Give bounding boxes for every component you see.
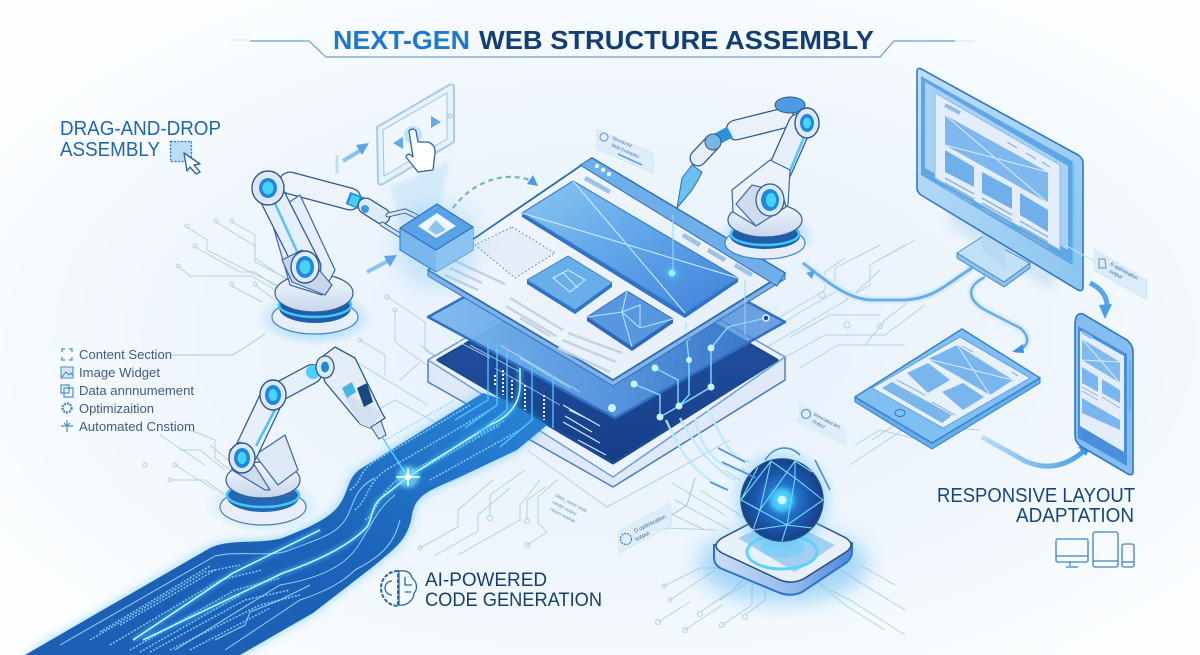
label: drag and drop — [60, 118, 221, 162]
component list: Data annnumement — [79, 384, 195, 398]
code snippet: return module — [550, 506, 577, 524]
status chip below stack: D optimization — [633, 514, 667, 535]
hero widget — [522, 213, 738, 318]
laser spark — [396, 466, 420, 488]
icon: mouse pointer — [184, 153, 200, 174]
browser header bar — [580, 158, 785, 286]
label: responsive layout adaptation — [937, 485, 1135, 567]
phone wireframe — [1082, 332, 1120, 430]
code snippet — [550, 492, 588, 524]
code stream band — [25, 350, 547, 655]
widget one — [527, 280, 612, 314]
status chip right of stack: Generated API — [813, 411, 841, 430]
swipe and pick arrows — [337, 143, 397, 272]
status chip right of stack: Output — [812, 418, 826, 430]
icon: gear brain — [381, 571, 416, 606]
status chip right of stack — [798, 403, 847, 447]
icon: content section — [62, 349, 72, 360]
chip near monitor — [1094, 249, 1147, 300]
status chip below stack — [618, 478, 695, 553]
dotted drop zone — [475, 227, 555, 278]
chip near monitor: 6 optimization — [1109, 262, 1139, 282]
label: AI powered code generation — [381, 570, 602, 611]
component list: Optimizaition — [79, 402, 154, 416]
code snippet: render output — [552, 499, 578, 517]
connector: monitor to stack — [803, 263, 972, 300]
label: drag and drop: DRAG-AND-DROP — [60, 118, 221, 140]
text lines — [445, 260, 622, 372]
robot arm: pick and place — [252, 171, 416, 346]
work point — [665, 266, 679, 280]
title: NEXT-GEN — [333, 25, 470, 55]
desktop monitor — [917, 68, 1094, 291]
label: AI powered code generation: AI-POWERED — [425, 570, 547, 591]
bright data lines — [133, 350, 520, 640]
component list — [61, 334, 265, 434]
icon: dashed selection — [170, 142, 192, 162]
status chip top: Web Examples — [611, 142, 641, 159]
component list: Automated Cnstiom — [79, 420, 195, 434]
label: AI powered code generation: CODE GENERATION — [425, 590, 602, 611]
bottom stack layer: code base — [428, 255, 785, 487]
label: responsive layout adaptation: RESPONSIVE LAYOUT — [937, 485, 1135, 507]
code snippet: class_name code — [555, 492, 588, 514]
label: responsive layout adaptation: ADAPTATION — [1016, 505, 1134, 527]
robot arm: laser coder — [205, 347, 408, 533]
AI core: sphere on pedestal — [698, 448, 868, 603]
title — [250, 25, 955, 57]
connector: monitor to phone — [1090, 283, 1112, 319]
tablet — [855, 329, 1040, 449]
icon: gear — [62, 404, 72, 412]
connector: tablet to phone — [982, 437, 1091, 466]
title: WEB STRUCTURE ASSEMBLY — [479, 25, 874, 55]
status chip top — [597, 130, 653, 173]
drag panel — [377, 84, 454, 225]
hand cursor icon — [406, 129, 435, 172]
monitor stand — [957, 222, 1030, 287]
icons: responsive devices — [1056, 532, 1134, 567]
icon: image widget — [61, 367, 73, 378]
vertical code streams — [455, 340, 553, 447]
tablet wireframe — [882, 345, 1018, 423]
robot arm: welding tool — [677, 97, 819, 261]
status chip top: Structured — [612, 135, 633, 149]
chip near monitor: output — [1108, 269, 1124, 281]
status chip below stack: output — [634, 530, 651, 543]
circuit lines on band — [60, 478, 400, 650]
top stack layer: browser window — [428, 158, 785, 386]
data network nodes — [608, 315, 769, 490]
icon: data pages — [61, 385, 73, 397]
component list: Image Widget — [79, 366, 161, 380]
circuit traces — [143, 40, 980, 635]
nav dashes — [585, 178, 752, 275]
phone — [1075, 314, 1133, 475]
image block carried by arm — [395, 203, 479, 287]
icon: automation — [61, 420, 73, 432]
connector: monitor to tablet — [971, 277, 1027, 353]
code texture on band — [90, 400, 520, 652]
component list: Content Section — [79, 348, 172, 362]
dashed move arc — [453, 175, 538, 208]
monitor wireframe — [945, 105, 1050, 247]
middle stack layer: glass — [428, 222, 785, 418]
label: drag and drop: ASSEMBLY — [60, 139, 160, 161]
widget two — [587, 317, 673, 351]
